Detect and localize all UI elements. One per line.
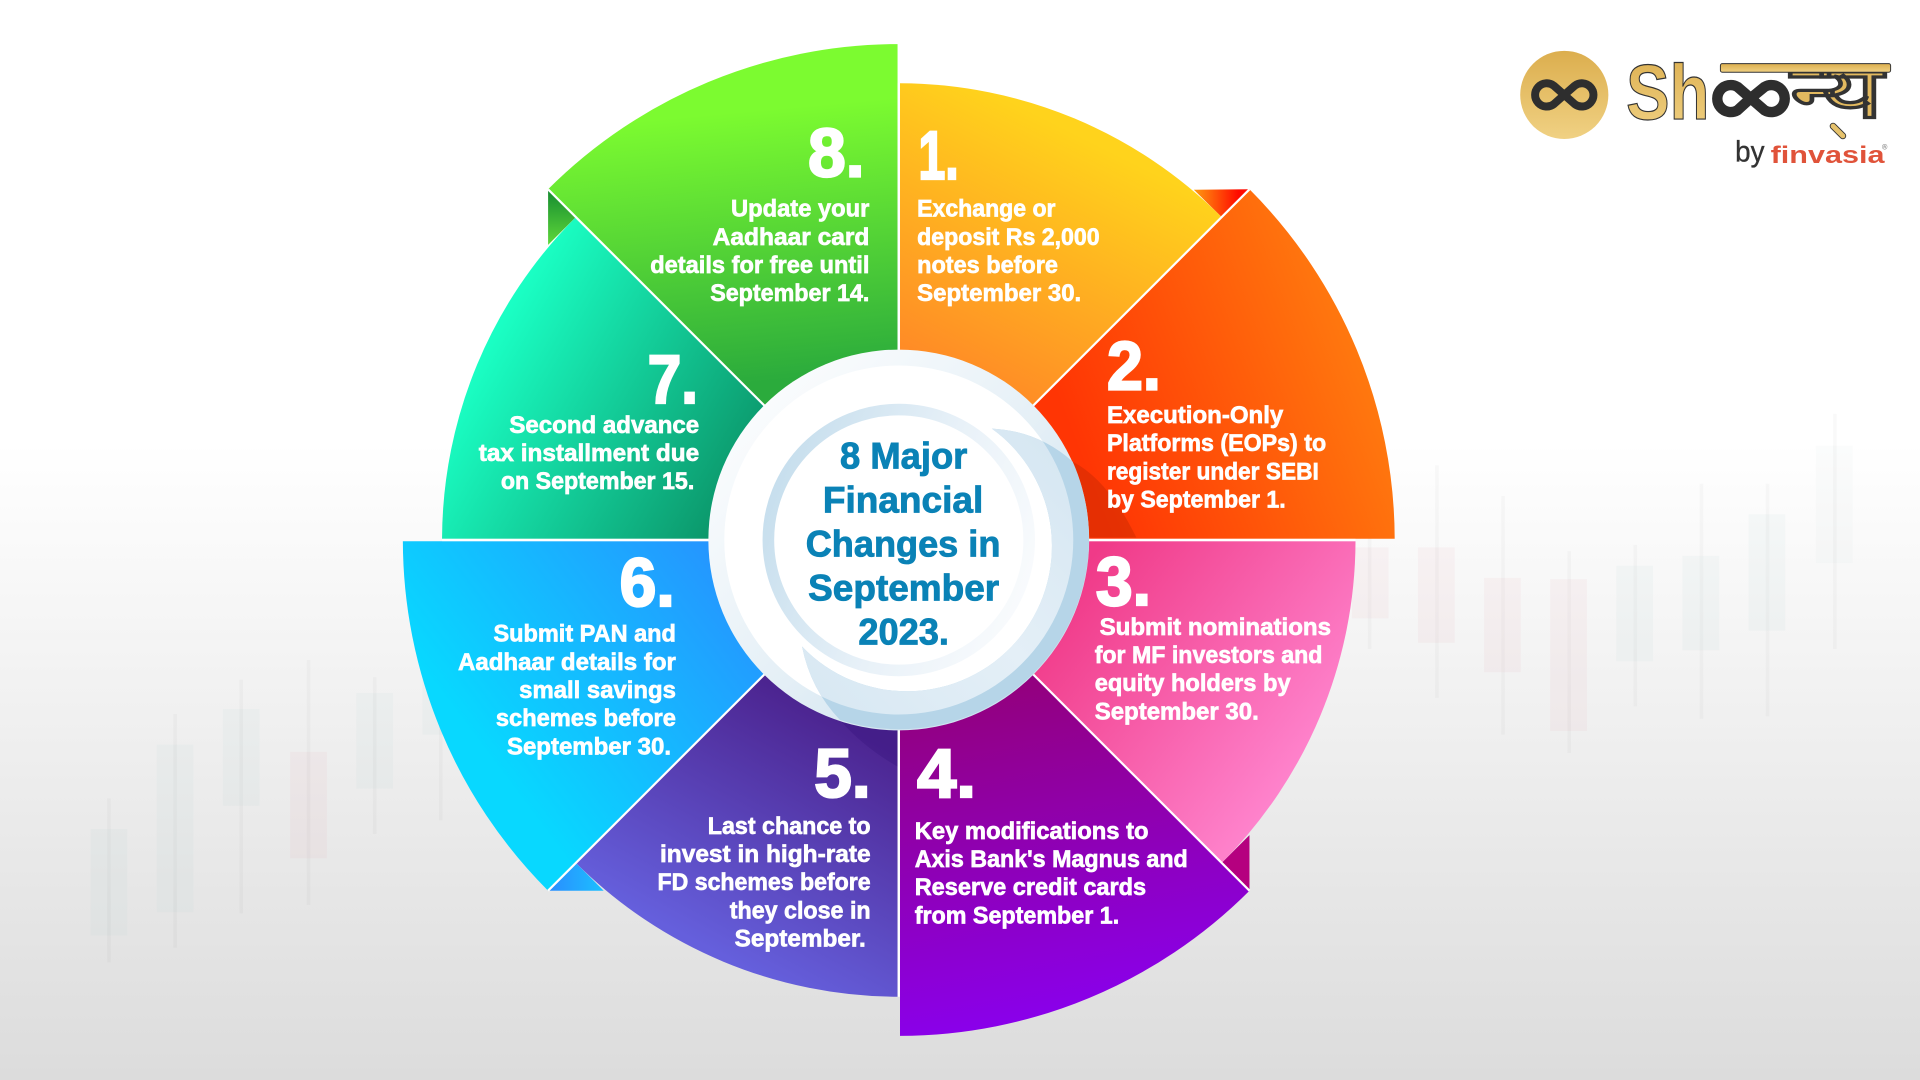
item 2 text — [1107, 327, 1326, 514]
item 6 text: September 30. — [507, 733, 671, 760]
item 1 text — [917, 117, 1100, 307]
inner ring — [768, 410, 1029, 670]
item 2 text: Execution-Only — [1107, 402, 1284, 429]
segment 2 — [899, 189, 1395, 540]
item 7 text: on September 15. — [501, 468, 694, 495]
fold: purple — [1222, 835, 1249, 891]
item 3 text: 3. — [1096, 543, 1151, 620]
item 8 text: 8. — [808, 114, 864, 191]
segment 1 — [900, 83, 1222, 540]
item 8 text — [650, 114, 869, 307]
item 7 text: 7. — [648, 341, 698, 418]
item 3 text — [1095, 543, 1331, 725]
item 4 text — [915, 735, 1188, 929]
segment 4 — [900, 540, 1249, 1036]
segment 8 — [548, 44, 898, 540]
by label: by — [1735, 136, 1765, 169]
fold: red — [1194, 189, 1249, 217]
item 6 text: Aadhaar details for — [458, 649, 676, 676]
item 5 text: invest in high-rate — [660, 841, 871, 868]
item 6 text: Submit PAN and — [493, 621, 676, 648]
title: 8 Major — [840, 435, 967, 476]
segment 5 — [576, 540, 898, 997]
item 4 text: 4. — [917, 735, 976, 812]
wheel — [403, 44, 1395, 1036]
curl: crescent — [802, 429, 1089, 729]
icon: logo disc with infinity — [1520, 51, 1608, 139]
fold: green — [548, 189, 576, 245]
item 5 text: FD schemes before — [658, 869, 871, 896]
title: September — [808, 568, 999, 609]
item 7 text: tax installment due — [479, 440, 699, 467]
item 6 text: 6. — [620, 544, 675, 621]
item 1 text: notes before — [917, 252, 1058, 279]
item 7 text: Second advance — [509, 412, 699, 439]
segment 6 — [403, 541, 899, 891]
shadow: curl right — [1073, 462, 1136, 538]
item 2 text: by September 1. — [1107, 487, 1286, 514]
item 7 text — [479, 341, 699, 495]
candlestick chart: right background — [1352, 414, 1853, 753]
segment 3 — [899, 541, 1356, 863]
title: Financial — [823, 479, 983, 520]
segment 7 — [442, 217, 899, 539]
item 3 text: for MF investors and — [1095, 642, 1322, 669]
item 8 text: Aadhaar card — [713, 224, 869, 251]
wordmark Sh: Sh — [1626, 48, 1709, 136]
item 1 text: 1. — [918, 117, 959, 194]
item 6 text: schemes before — [496, 705, 676, 732]
item 6 text: small savings — [519, 677, 676, 704]
separators — [442, 83, 1356, 997]
icon: wordmark infinity — [1717, 85, 1785, 112]
item 5 text: Last chance to — [708, 813, 871, 840]
shadow: curl bottom — [840, 720, 898, 767]
item 2 text: register under SEBI — [1107, 458, 1319, 485]
item 3 text: September 30. — [1095, 698, 1259, 725]
title: 2023. — [858, 612, 949, 653]
item 5 text: they close in — [730, 897, 871, 924]
item 8 text: September 14. — [710, 280, 869, 307]
wordmark lower mark — [1833, 126, 1843, 136]
item 8 text: details for free until — [650, 252, 869, 279]
center disc — [708, 350, 1089, 730]
item 2 text: 2. — [1107, 327, 1161, 404]
item 1 text: September 30. — [917, 280, 1081, 307]
title — [806, 435, 1000, 653]
item 8 text: Update your — [731, 196, 869, 223]
logo — [1520, 48, 1891, 169]
item 6 text — [458, 544, 676, 760]
item 1 text: deposit Rs 2,000 — [917, 224, 1100, 251]
fold: blue — [548, 863, 604, 891]
item 3 text: Submit nominations — [1100, 614, 1331, 641]
item 1 text: Exchange or — [917, 196, 1056, 223]
item 2 text: Platforms (EOPs) to — [1107, 430, 1326, 457]
item 4 text: from September 1. — [915, 902, 1119, 929]
title: Changes in — [806, 524, 1000, 565]
item 3 text: equity holders by — [1095, 670, 1291, 697]
wordmark devanagari: न्य — [1787, 51, 1887, 134]
item 4 text: Key modifications to — [915, 818, 1149, 845]
item 5 text: September. — [735, 926, 866, 953]
item 4 text: Reserve credit cards — [915, 874, 1146, 901]
item 5 text — [658, 735, 871, 953]
finvasia label: finvasia — [1771, 142, 1885, 169]
item 4 text: Axis Bank's Magnus and — [915, 846, 1188, 873]
candlestick chart: left background — [91, 649, 459, 962]
registered mark: ® — [1882, 142, 1888, 151]
wordmark headline bar — [1720, 64, 1891, 72]
item 5 text: 5. — [814, 735, 871, 812]
